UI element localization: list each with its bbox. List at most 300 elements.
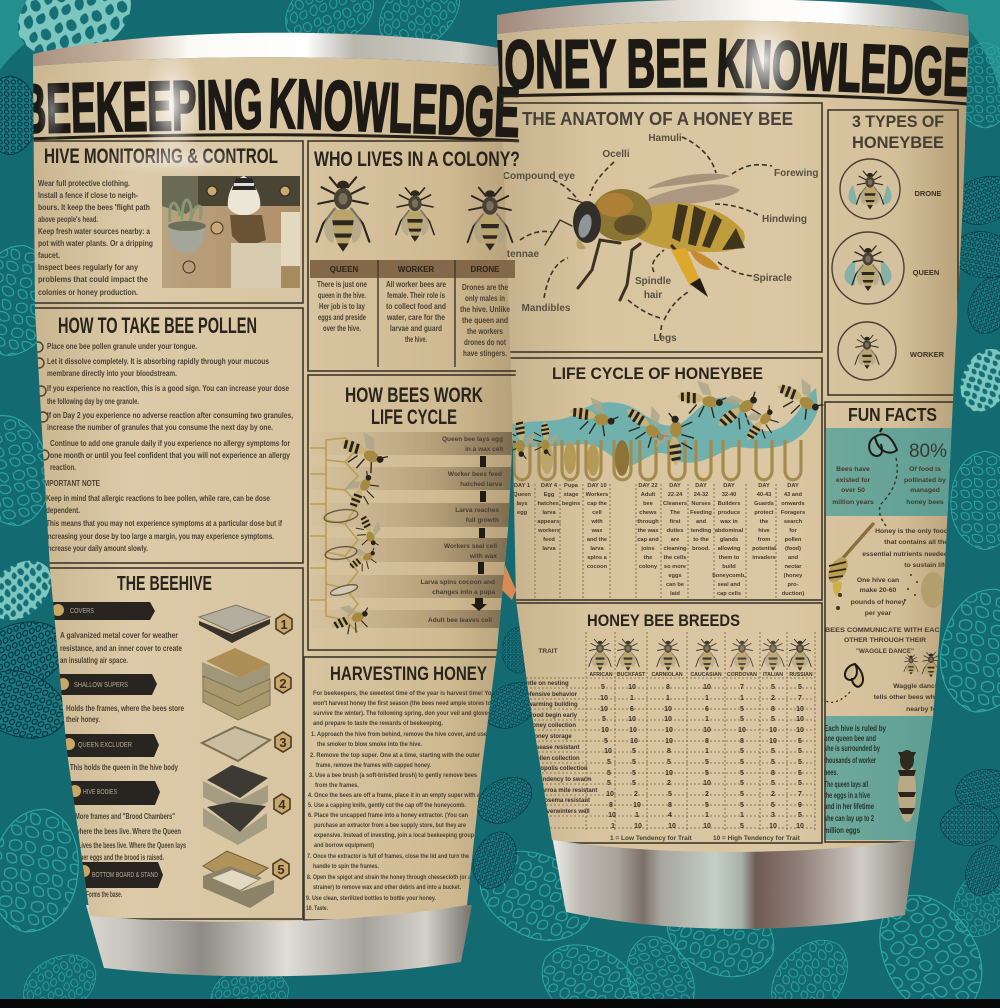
day columns text: Pupa (564, 483, 579, 489)
breed values: 8 (771, 706, 775, 713)
breed values: 5 (602, 716, 606, 723)
honey facts: One hive can (857, 577, 899, 584)
anatomy labels: Spindle (635, 276, 671, 287)
heading: hive monitoring: HIVE MONITORING & CONTROL (44, 145, 278, 168)
day columns text: wax in (719, 519, 738, 525)
anatomy labels: Compound eye (503, 171, 575, 182)
day columns text: bee (643, 501, 653, 507)
day columns text: cleaning (663, 546, 687, 552)
queen text: There is just one (317, 280, 367, 289)
day columns text: duties (667, 528, 683, 534)
breed values: 1 (635, 812, 639, 819)
breed values: 5 (798, 759, 802, 766)
day columns text: 43 and (784, 492, 803, 498)
hive part: bottom board (203, 851, 274, 908)
trait names: Honey collection (528, 723, 576, 729)
worker text: the hive. (405, 335, 427, 344)
honey facts: per year (865, 610, 892, 617)
breed values: 10 (664, 706, 672, 713)
heading: colony: WHO LIVES IN A COLONY? (314, 148, 520, 171)
queen badge (832, 232, 939, 304)
panel: hive monitoring and control (38, 145, 300, 297)
breed values: 5 (601, 684, 605, 691)
breed values: 10 (633, 802, 641, 809)
food pollinated: honey bees (906, 499, 944, 506)
harvesting text: 8. Open the spigot and strain the honey through cheesecloth (or a (307, 874, 471, 881)
stage labels: Adult bee leaves cell (428, 617, 492, 624)
trait names (518, 681, 597, 815)
stage labels: with wax (469, 553, 497, 560)
trait names: Gentle on nesting (518, 681, 569, 687)
hive monitoring text: faucet. (38, 251, 60, 260)
day columns text: egg (517, 510, 528, 516)
day columns text: 24-32 (694, 492, 708, 498)
beehive descriptions: where the bees live. Where the Queen (74, 827, 181, 836)
bees have existed: existed for (836, 477, 871, 484)
day columns text: allowing (718, 546, 741, 552)
day columns text: cap the (587, 501, 607, 507)
harvesting text: purchase an extractor from a bee supply store, but they are (314, 822, 466, 829)
day columns text: larva (542, 510, 556, 516)
breed values: 5 (740, 759, 744, 766)
queen text: eggs and preside (318, 313, 366, 322)
honey facts: Honey is the only food (875, 528, 948, 535)
breed values: 5 (607, 770, 611, 777)
brood cell tubes (514, 440, 801, 480)
pollen text: IMPORTANT NOTE (42, 479, 101, 488)
panel: honey bee breeds (518, 611, 815, 842)
larvae (323, 508, 359, 597)
breed values: 2 (705, 791, 709, 798)
developing brood (541, 440, 629, 476)
day columns text: search (784, 519, 803, 525)
breeds legend: 10 = High Tendency for Trait (713, 835, 801, 842)
harvesting text: from the frames. (315, 782, 359, 789)
day columns text: Guards (754, 501, 774, 507)
day columns text (513, 483, 805, 597)
honey facts: essential nutrients needed (862, 551, 948, 558)
breed values: 5 (668, 791, 672, 798)
breed values: 2 (771, 791, 775, 798)
breed values: 1 (705, 748, 709, 755)
day columns text: hive (758, 528, 770, 534)
day columns text: (honey (784, 573, 803, 579)
breed names: BUCKFAST (617, 672, 646, 678)
breed values: 5 (740, 706, 744, 713)
queen text (317, 280, 367, 333)
flying bees (505, 370, 829, 465)
hive monitoring text: pot with water plants. Or a dripping (38, 239, 153, 248)
heading: breeds: HONEY BEE BREEDS (587, 611, 740, 630)
breeds legend (610, 835, 801, 842)
breed values: 8 (609, 802, 613, 809)
breed values: 9 (798, 802, 802, 809)
hive monitoring text: Keep fresh water sources nearby: a (38, 227, 150, 236)
day columns text: DAY 22 (638, 483, 658, 489)
stage labels: changes into a pupa (432, 589, 495, 596)
panel: three types of honeybee (832, 112, 945, 380)
table header band: DRONE (471, 265, 500, 274)
hive part: hive bodies (203, 765, 268, 845)
day columns text: the wax (638, 528, 659, 534)
breed values: 1 (740, 695, 744, 702)
day columns text: can be (666, 582, 684, 588)
pollen text: If on Day 2 you experience no adverse reaction after consuming two granules, (47, 411, 293, 420)
hive monitoring text: bours. It keep the bees 'flight path (38, 203, 150, 212)
waggle dance text: OTHER THROUGH THEIR (844, 637, 926, 644)
heading: anatomy: THE ANATOMY OF A HONEY BEE (522, 109, 793, 129)
heading: bee pollen: HOW TO TAKE BEE POLLEN (58, 313, 257, 338)
hive monitoring text: Inspect bees regularly for any (38, 263, 138, 272)
food pollinated: Of food is (909, 466, 941, 473)
breed values: 5 (632, 759, 636, 766)
trait names: Brood begin early (526, 713, 578, 719)
day columns text: pollen (785, 537, 802, 543)
breed values: 2 (667, 780, 671, 787)
day columns text: joins (640, 546, 655, 552)
breed values: 5 (705, 759, 709, 766)
day columns text: 40-43 (757, 492, 771, 498)
day columns text: DAY 4 (541, 483, 558, 489)
day columns text: and the (587, 537, 607, 543)
day columns text: DAY (723, 483, 735, 489)
trait names: Nosema resistant (540, 798, 590, 804)
stage labels (421, 436, 503, 624)
waggle dance text (825, 627, 945, 713)
left tumbler rim (33, 33, 520, 68)
teal block: queen facts (824, 716, 951, 840)
stage bands (348, 432, 512, 628)
right tumbler rim (497, 0, 969, 36)
title: beekeeping knowledge: BEEKEEPING (19, 65, 263, 148)
right tumbler graphic (476, 5, 970, 843)
breed names (589, 672, 813, 678)
beehive descriptions: Forms the base. (86, 890, 122, 899)
breed values: 10 (601, 727, 609, 734)
day columns text: seal and (718, 582, 741, 588)
harvesting text: 3. Use a bee brush (a soft-bristled brush) to gently remove bees (309, 772, 477, 779)
panel: how bees work life cycle (310, 384, 512, 640)
drone badge (840, 159, 942, 219)
day columns text: lays (516, 501, 528, 507)
food pollinated: pollinated by (904, 477, 946, 484)
hive part: shallow supers (202, 648, 270, 720)
breed values: 5 (740, 791, 744, 798)
panel: anatomy of a honey bee (493, 109, 818, 344)
trait names: Defensive behavior (522, 692, 578, 698)
harvesting text: For beekeepers, the sweetest time of the year is harvest time! You (313, 690, 495, 697)
breed names: CARNIOLAN (651, 672, 683, 678)
breed values: 10 (665, 770, 673, 777)
breed values: 1 (705, 812, 709, 819)
harvesting text: 6. Place the uncapped frame into a honey extractor. (You can (308, 812, 468, 819)
pollen text: Let it dissolve completely. It is absorbing rapidly through your mucous (47, 357, 269, 366)
breed values: 10 (608, 812, 616, 819)
hexagon numbers 1 to 5 (273, 614, 292, 879)
breed values: 5 (632, 770, 636, 777)
beehive descriptions: an insulating air space. (60, 656, 128, 665)
day columns text: through (637, 519, 659, 525)
queen facts text: the eggs in a hive (824, 791, 870, 800)
day columns text: begins (562, 501, 580, 507)
pollen text: Continue to add one granule daily if you experience no allergy symptoms for (50, 439, 290, 448)
drone text (460, 283, 510, 358)
harvesting text: strainer) to remove wax and other debris and into a bucket. (313, 884, 461, 891)
panel: the beehive (45, 573, 292, 908)
day columns text: 22-24 (668, 492, 683, 498)
breeds grid (522, 632, 815, 830)
breed values: 6 (705, 706, 709, 713)
day columns text: (food) (785, 546, 801, 552)
stage labels: full growth (466, 517, 499, 524)
day columns text: potential (752, 546, 776, 552)
breed values: 1 (705, 695, 709, 702)
day columns text: workers (537, 528, 560, 534)
queen badge: QUEEN (913, 268, 939, 277)
icon: worker bee (396, 188, 434, 242)
breed values: 5 (607, 759, 611, 766)
hive part: queen excluder (202, 727, 270, 761)
harvesting text: expensive. Instead of investing, join a local beekeeping group (314, 832, 474, 839)
breed values: 10 (769, 738, 777, 745)
title: beekeeping knowledge (33, 78, 519, 138)
breed values: 10 (665, 727, 673, 734)
breed values: 3 (771, 812, 775, 819)
heading: how bees work: HOW BEES WORK (345, 384, 483, 407)
breed values: 5 (798, 684, 802, 691)
beehive descriptions: A galvanized metal cover for weather (60, 631, 178, 640)
pollen text: Place one bee pollen granule under your tongue. (47, 342, 197, 351)
hexagon numbers 1 to 5: 1 (280, 617, 288, 632)
worker text: larvae and guard (390, 324, 442, 333)
day columns text: brood. (692, 546, 710, 552)
breed values: 7 (740, 684, 744, 691)
pollen text: dependent. (46, 506, 80, 515)
beehive descriptions: Lives the bees live. Where the Queen lays (78, 841, 186, 850)
small bees (904, 652, 940, 677)
breed values: 1 (666, 695, 670, 702)
hive monitoring text: colonies or honey production. (38, 288, 138, 297)
day columns text: first (670, 519, 680, 525)
tag: queen excluder: QUEEN EXCLUDER (78, 742, 132, 749)
pollen text: membrane directly into your bloodstream. (47, 369, 177, 378)
anatomy labels: Hindwing (762, 214, 807, 225)
day columns text: abdominal (715, 528, 744, 534)
queen facts text: bees. (824, 768, 838, 777)
stage labels: Workers seal cell (444, 543, 497, 550)
breed values: 1 (740, 812, 744, 819)
food pollinated (904, 466, 946, 506)
title: honey bee knowledge: HONEY BEE (476, 25, 708, 103)
table header band: QUEEN (330, 265, 358, 274)
waggle dance text: Waggle dancing (893, 683, 945, 690)
stage labels: hatched larva (460, 481, 502, 488)
breed values: 6 (630, 706, 634, 713)
harvesting text: handle to spin the frames. (313, 863, 379, 870)
pollen text: increasing your dose by too large a margin, you may experience symptoms. (46, 532, 274, 541)
queen facts text: and in her lifetime (824, 802, 874, 811)
day columns text: stage (564, 492, 578, 498)
tag: covers (45, 602, 155, 620)
day columns text: protect (754, 510, 774, 516)
right tumbler (497, 0, 969, 929)
drone text: only males in (465, 294, 505, 303)
harvesting text: won't harvest honey the first season (the bees need ample stores to (312, 700, 491, 707)
breed values: 5 (798, 780, 802, 787)
worker badge: WORKER (910, 350, 945, 359)
breed values: 5 (798, 812, 802, 819)
stage labels: in a wax cell (465, 446, 503, 453)
breed values (600, 684, 804, 830)
honey facts: pounds of honey (851, 599, 906, 606)
day columns text: nectar (784, 564, 802, 570)
dotted flight path (879, 458, 897, 526)
pollen text: the following day by one granule. (47, 397, 139, 406)
80 percent figure: 80% (909, 441, 947, 462)
anatomy labels: Ocelli (602, 149, 630, 160)
stage labels: Queen bee lays egg (442, 436, 503, 443)
breed values: 8 (705, 738, 709, 745)
tag: bottom board and stand (78, 862, 163, 888)
breed values: 5 (632, 748, 636, 755)
worker text: All worker bees are (386, 280, 446, 289)
panel: life cycle of honeybee (505, 364, 829, 598)
queen text: Her job is to lay (319, 302, 365, 311)
bees have existed (832, 466, 874, 506)
bees have existed: over 50 (841, 487, 865, 494)
breed values: 10 (796, 706, 804, 713)
breed values: 8 (771, 770, 775, 777)
trait names: Pollen collection (532, 756, 580, 762)
left tumbler (33, 33, 520, 976)
anatomy labels: Legs (653, 333, 677, 344)
hive monitoring text: Install a fence if close to neigh- (38, 191, 138, 200)
drone badge: DRONE (914, 189, 942, 198)
beehive descriptions: her eggs and the brood is raised. (80, 853, 164, 862)
harvesting text: frame, remove the frames with capped honey. (316, 762, 431, 769)
hive monitoring text: Wear full protective clothing. (38, 179, 130, 188)
breed values: 5 (632, 780, 636, 787)
day columns text: 32-40 (722, 492, 736, 498)
glare highlights on right tumbler (570, 5, 830, 115)
drone text: have stingers. (463, 349, 507, 358)
pollen text: This means that you may not experience symptoms at a particular dose but if (46, 519, 282, 528)
worker text: female. Their role is (387, 291, 445, 300)
worker text: water, care for the (386, 313, 445, 322)
hive monitoring text (38, 179, 153, 297)
breed values: 10 (630, 738, 638, 745)
breed values: 5 (798, 738, 802, 745)
breed values: 10 (796, 727, 804, 734)
glare highlights on left tumbler (38, 43, 255, 176)
queen facts text: thousands of worker (824, 756, 876, 765)
bees have existed: Bees have (836, 466, 870, 473)
breed values: 10 (628, 716, 636, 723)
breed values: 10 (664, 716, 672, 723)
right tumbler paper body (497, 21, 969, 852)
day columns text: hatches, (537, 501, 561, 507)
day columns text: appears, (537, 519, 561, 525)
hive monitoring text: above people's head. (38, 215, 98, 224)
harvesting text: 5. Use a capping knife, gently cut the cap off the honeycomb. (308, 802, 466, 809)
icon: drone bee (468, 188, 512, 251)
day columns text: eggs (668, 573, 682, 579)
anatomy labels: Forewing (774, 168, 818, 179)
breed values: 2 (771, 695, 775, 702)
harvesting text: 9. Use clean, sterilized bottles to bottle your honey. (306, 895, 436, 902)
breed values: 5 (798, 748, 802, 755)
anatomy labels: Antennae (493, 249, 539, 260)
breed values: 7 (798, 695, 802, 702)
harvesting text: the smoker to blow smoke into the hive. (317, 741, 422, 748)
honey facts: to sustain life (904, 562, 948, 569)
day columns text: DAY (787, 483, 799, 489)
breed values: 5 (740, 748, 744, 755)
day columns text: DAY (669, 483, 681, 489)
queen facts text: Each hive is ruled by (824, 724, 886, 733)
harvesting text: survive the winter). The following spring, don your veil and gloves (313, 710, 491, 717)
harvesting text: 7. Once the extractor is full of frames, close the lid and turn the (307, 853, 469, 860)
breed values: 10 (703, 823, 711, 830)
harvesting text (306, 690, 495, 912)
drone text: Drones are the (462, 283, 508, 292)
breed values: 2 (634, 791, 638, 798)
heading: fun facts: FUN FACTS (848, 405, 937, 425)
beehive descriptions: This holds the queen in the hive body (70, 763, 178, 772)
day columns text: the (760, 519, 768, 525)
icon: honey dipper (824, 524, 873, 610)
day columns text: Egg (544, 492, 555, 498)
breed values: 1 (705, 716, 709, 723)
harvesting text: and borrow equipment) (314, 842, 374, 849)
stage arrows (471, 456, 487, 611)
day columns text: duction) (782, 591, 804, 597)
honey facts: that contains all the (884, 539, 948, 546)
day columns text: Workers (586, 492, 608, 498)
panel: harvesting honey (306, 664, 495, 912)
breed values: 10 (796, 823, 804, 830)
heading: three types: HONEYBEE (852, 133, 944, 152)
breed values: 5 (740, 823, 744, 830)
breed values: 10 (668, 823, 676, 830)
day columns text: glands (720, 537, 738, 543)
breed values: 5 (771, 802, 775, 809)
anatomy labels (493, 133, 818, 344)
orange and teal gap between tumblers (502, 565, 516, 600)
breed values: 10 (738, 727, 746, 734)
heading: how bees work: LIFE CYCLE (371, 406, 457, 429)
breed values: 5 (740, 780, 744, 787)
breed values: 5 (740, 802, 744, 809)
day columns text: DAY 1 (514, 483, 530, 489)
beehive descriptions (60, 631, 186, 899)
breeds legend: 1 = Low Tendency for Trait (610, 835, 693, 842)
day columns text: wax (591, 528, 603, 534)
illustration: beekeeper and hive (162, 176, 300, 288)
breed values: 10 (703, 727, 711, 734)
day columns text: Foragers (781, 510, 805, 516)
beehive descriptions: their honey. (66, 715, 100, 724)
stage labels: Larva reaches (455, 507, 499, 514)
hexagon numbers 1 to 5: 3 (279, 735, 287, 750)
tag: covers: COVERS (70, 608, 94, 615)
day columns text: produce (718, 510, 740, 516)
breed values: 10 (629, 727, 637, 734)
trait names: Tendency to swarm (536, 777, 592, 783)
breed values: 10 (604, 748, 612, 755)
day columns text: larva (542, 546, 556, 552)
day columns text: Cleaners (663, 501, 687, 507)
